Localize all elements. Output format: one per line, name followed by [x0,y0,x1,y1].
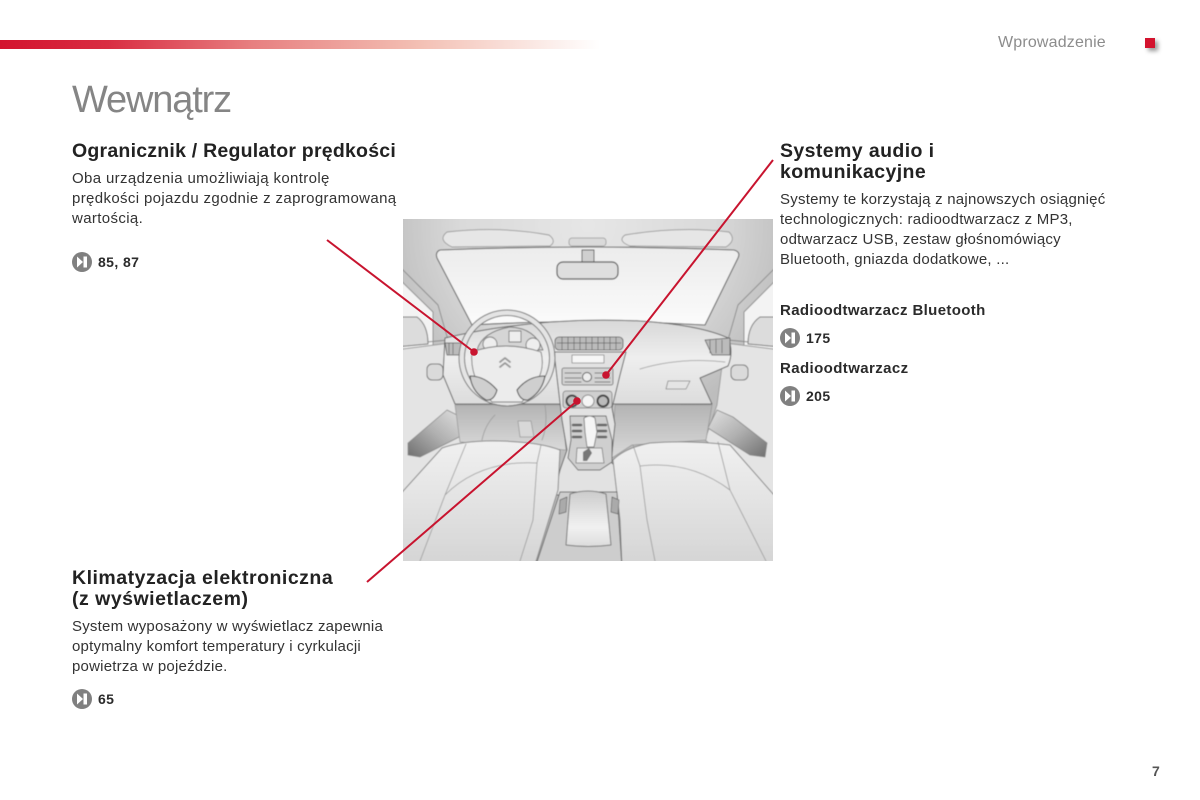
air vents [445,337,730,355]
subheading: Bluetooth radio: Radioodtwarzacz Bluetooth [780,302,986,319]
gear shifter [584,416,597,447]
side windows and pillars [403,269,773,349]
heading: air conditioning [72,567,333,610]
text: audio systems: odtwarzacz USB, zestaw głośnomówiący [780,231,1061,248]
sun visors [443,230,732,247]
door pockets [408,410,463,457]
callout: audio [602,160,773,379]
gear shifter surround [568,416,612,470]
glovebox handle [666,381,690,389]
page reference: 85, 87: 85, 87 [98,254,139,270]
instrument cluster [477,327,543,350]
heading: air conditioning: Klimatyzacja elektroniczna [72,567,333,589]
windshield [436,247,739,325]
roof background [395,212,781,568]
page number: 7 [1152,763,1160,779]
rear-view mirror [557,250,618,279]
heading: speed limiter: Ogranicznik / Regulator prędkości [72,140,396,162]
page reference: 205: 205 [806,388,831,404]
callout: speed limiter [327,240,478,356]
section name: Wprowadzenie [998,34,1106,51]
panel: speed limiter [72,140,396,272]
text: speed limiter: prędkości pojazdu zgodnie z zaprogramowaną [72,190,396,207]
left seat [395,441,560,568]
header gradient bar [0,40,600,49]
page reference: 175: 175 [806,330,831,346]
page reference: 175 [780,328,831,348]
text: audio systems: technologicznych: radioodtwarzacz z MP3, [780,211,1073,228]
wheel rim [462,313,552,403]
heading: audio systems: komunikacyjne [780,161,926,183]
text: audio systems: Systemy te korzystają z najnowszych osiągnięć [780,191,1105,208]
text: air conditioning: optymalny komfort temperatury i cyrkulacji [72,638,361,655]
dashboard [443,320,731,404]
side door panels [395,343,781,500]
radio screen [572,355,604,363]
side mirrors [395,317,781,347]
page reference: 85, 87 [72,252,139,272]
pedals [518,421,534,437]
text: air conditioning [72,618,383,675]
armrest [566,491,611,546]
logo [500,358,510,367]
text: speed limiter: wartością. [72,210,143,227]
callout: climate [367,397,581,582]
page reference: 65: 65 [98,691,114,707]
right seat [613,442,781,568]
heading: audio systems: Systemy audio i [780,140,934,162]
centre stack [554,352,630,495]
illustration: car interior [326,159,774,583]
door handles [427,364,748,380]
car interior drawing [395,212,781,568]
title: Wewnątrz [72,79,231,121]
page reference: 205 [780,386,831,406]
text: air conditioning: System wyposażony w wyświetlacz zapewnia [72,618,383,635]
panel: air conditioning [72,567,383,709]
subheading: radio: Radioodtwarzacz [780,360,909,377]
footwells [455,405,566,450]
overhead console [569,238,606,246]
text: audio systems: Bluetooth, gniazda dodatkowe, ... [780,251,1009,268]
heading: audio systems [780,140,934,183]
heading: air conditioning: (z wyświetlaczem) [72,588,248,610]
page reference: 65 [72,689,114,709]
callout lines [327,160,773,582]
steering hub [472,346,542,402]
climate controls [563,391,612,408]
text: speed limiter [72,170,396,227]
text: air conditioning: powietrza w pojeździe. [72,658,228,675]
panel: audio systems [780,140,1105,406]
text: audio systems [780,191,1105,268]
text: speed limiter: Oba urządzenia umożliwiają kontrolę [72,170,330,187]
section marker: red square [1145,38,1155,48]
steering wheel [459,310,555,406]
wheel spokes openings [470,376,545,400]
console tunnel [535,492,622,568]
radio unit [562,368,613,385]
